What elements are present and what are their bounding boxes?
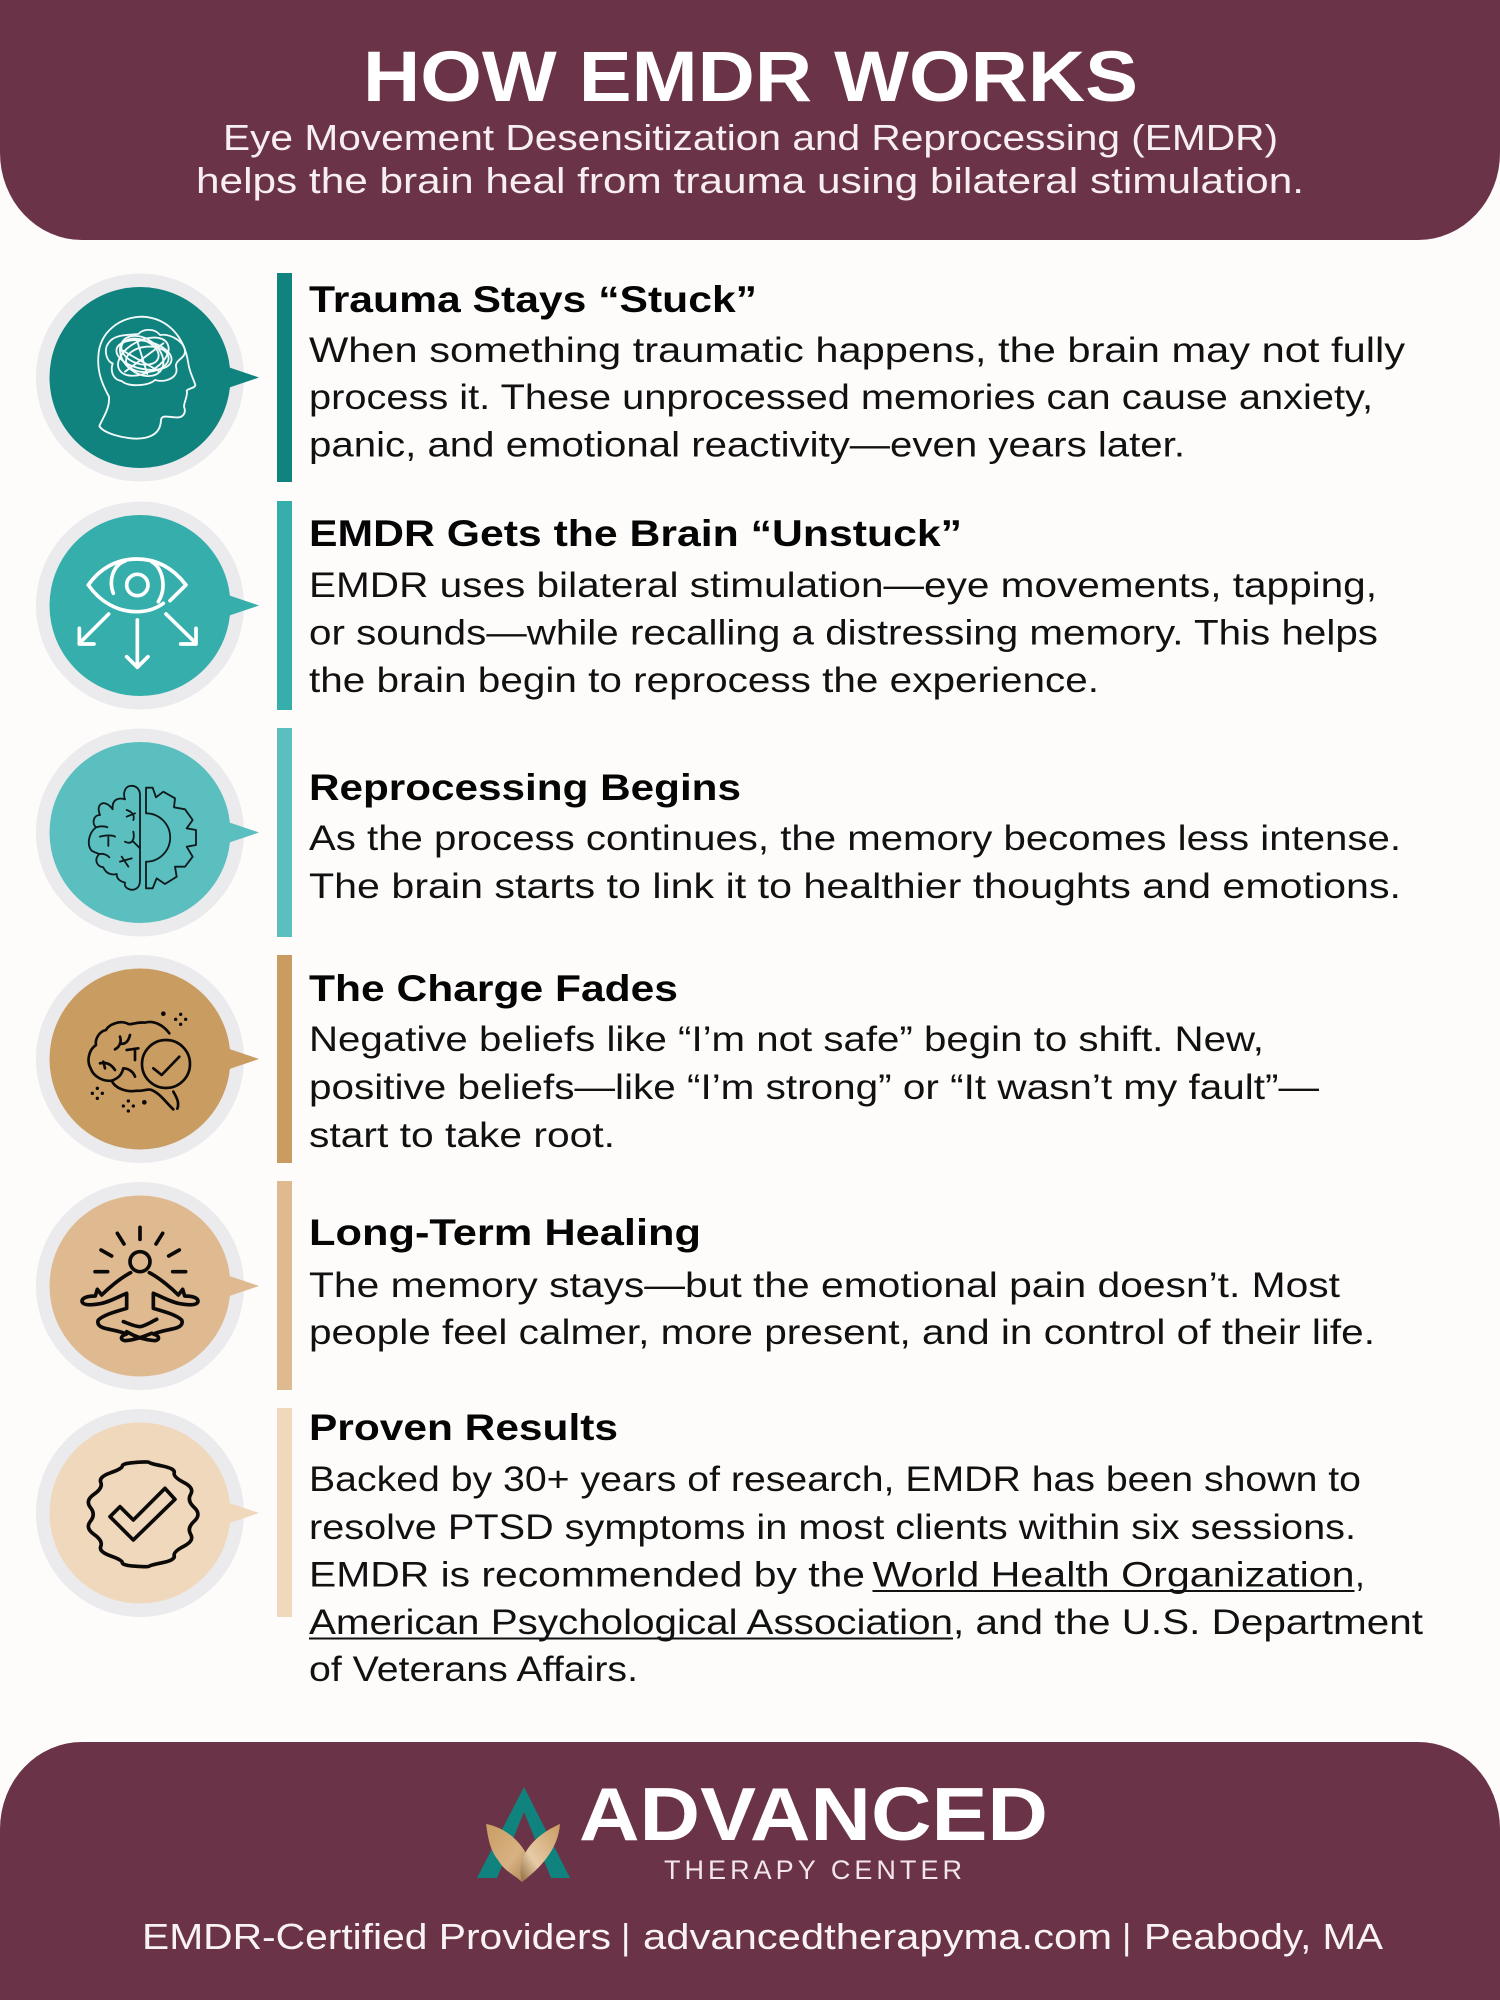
subtitle: helps the brain heal from trauma using bilateral stimulation. — [196, 160, 1304, 201]
heading: EMDR Gets the Brain “Unstuck” — [309, 513, 962, 554]
accent bar — [277, 728, 292, 937]
icon: eye with arrows — [36, 502, 259, 710]
body text: When something traumatic happens, the brain may not fully — [309, 330, 1405, 370]
footer contact line: Peabody, MA — [1144, 1916, 1383, 1957]
body text: process it. These unprocessed memories can cause anxiety, — [309, 377, 1373, 417]
body text: The memory stays—but the emotional pain doesn’t. Most — [309, 1265, 1340, 1305]
icon: half brain half gear — [36, 728, 259, 936]
logo tagline: THERAPY CENTER — [664, 1855, 962, 1885]
heading: Long-Term Healing — [309, 1212, 701, 1253]
heading: The Charge Fades — [309, 968, 678, 1009]
footer contact line: EMDR-Certified Providers — [142, 1916, 611, 1957]
body text: panic, and emotional reactivity—even years later. — [309, 424, 1185, 464]
subtitle: Eye Movement Desensitization and Reprocessing (EMDR) — [223, 117, 1278, 158]
panel: step 1 trauma stays stuck — [36, 273, 1405, 482]
body text — [309, 1459, 1423, 1689]
logo wordmark: ADVANCED — [579, 1772, 1048, 1856]
panel: step 4 the charge fades — [36, 955, 1320, 1163]
body text — [309, 330, 1405, 464]
icon: meditating figure — [36, 1182, 259, 1390]
accent bar — [277, 1408, 292, 1617]
panel: step 3 reprocessing begins — [36, 728, 1401, 937]
body text: resolve PTSD symptoms in most clients within six sessions. — [309, 1507, 1356, 1547]
body text: , — [1355, 1554, 1365, 1594]
body text: EMDR is recommended by the — [309, 1554, 865, 1594]
header banner — [0, 0, 1500, 240]
body text: The brain starts to link it to healthier thoughts and emotions. — [309, 866, 1401, 906]
footer contact line: | — [621, 1916, 630, 1957]
body text: As the process continues, the memory becomes less intense. — [309, 818, 1401, 858]
heading: Reprocessing Begins — [309, 767, 741, 808]
footer contact line: advancedtherapyma.com — [643, 1916, 1112, 1957]
body text: the brain begin to reprocess the experience. — [309, 660, 1099, 700]
subtitle — [196, 117, 1304, 201]
heading: Proven Results — [309, 1407, 618, 1448]
body text — [309, 818, 1401, 906]
body text: or sounds—while recalling a distressing memory. This helps — [309, 612, 1378, 652]
accent bar — [277, 501, 292, 710]
body text — [309, 565, 1378, 700]
title: HOW EMDR WORKS — [363, 38, 1138, 117]
body text: of Veterans Affairs. — [309, 1649, 638, 1689]
panel: step 5 long-term healing — [36, 1181, 1375, 1390]
body text: Negative beliefs like “I’m not safe” begin to shift. New, — [309, 1019, 1264, 1059]
icon: badge with check — [36, 1409, 259, 1617]
footer contact line — [142, 1916, 1383, 1957]
footer contact line: | — [1122, 1916, 1131, 1957]
body text: start to take root. — [309, 1115, 615, 1155]
accent bar — [277, 955, 292, 1163]
accent bar — [277, 1181, 292, 1390]
heading: Trauma Stays “Stuck” — [309, 279, 757, 320]
panel: step 6 proven results — [36, 1407, 1423, 1689]
panel: step 2 unstuck — [36, 501, 1378, 710]
footer banner — [0, 1742, 1500, 2000]
body text — [309, 1019, 1320, 1155]
body text: Backed by 30+ years of research, EMDR has been shown to — [309, 1459, 1361, 1499]
body text: World Health Organization — [872, 1554, 1354, 1594]
icon: logo mark — [477, 1787, 570, 1882]
body text: EMDR uses bilateral stimulation—eye movements, tapping, — [309, 565, 1377, 605]
icon: head with tangled thoughts — [36, 274, 259, 482]
body text: positive beliefs—like “I’m strong” or “It wasn’t my fault”— — [309, 1067, 1320, 1107]
body text: people feel calmer, more present, and in control of their life. — [309, 1312, 1375, 1352]
accent bar — [277, 273, 292, 482]
body text — [309, 1265, 1375, 1352]
body text: American Psychological Association — [309, 1602, 953, 1642]
icon: brain with check mark — [36, 955, 259, 1163]
body text: , and the U.S. Department — [953, 1602, 1423, 1642]
